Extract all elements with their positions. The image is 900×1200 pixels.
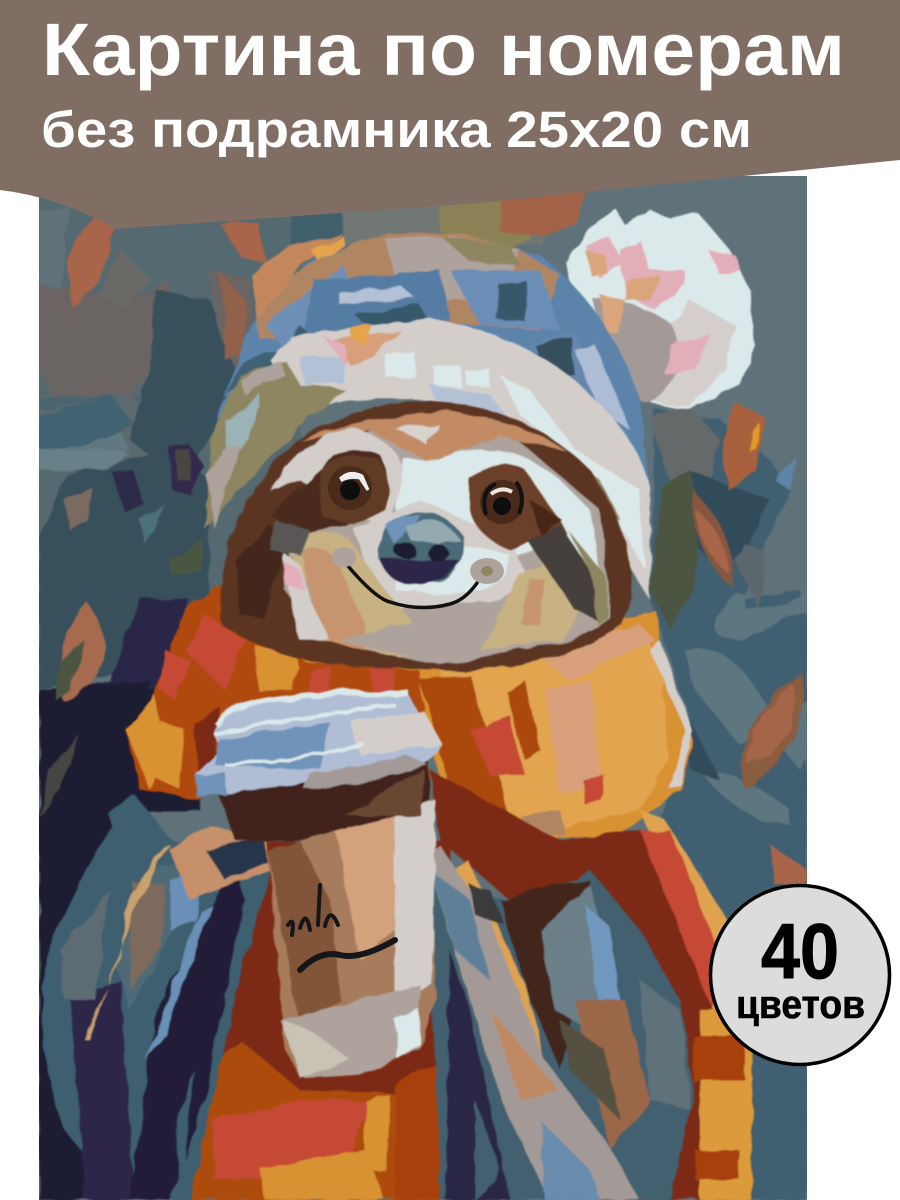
title: Картина по номерам (42, 8, 845, 91)
face fur (285, 418, 612, 665)
badge number: 40 (761, 907, 839, 995)
cup lid (195, 693, 443, 796)
right eye (480, 480, 524, 524)
hat pompom (566, 208, 755, 409)
autumn leaves (39, 208, 807, 885)
subtitle: без подрамника 25х20 см (41, 101, 752, 158)
cup scribble lettering (288, 885, 395, 970)
eye patches (270, 450, 610, 625)
scarf lower body (180, 840, 470, 1200)
navy lower left (92, 596, 188, 690)
cup body (268, 800, 436, 1078)
painting background (39, 176, 807, 1200)
sloth face (221, 402, 631, 670)
cheek spots (332, 547, 504, 584)
nose (378, 512, 462, 586)
hat white brim (205, 318, 650, 600)
header banner (0, 0, 900, 229)
coffee cup (195, 693, 443, 1078)
knitted hat (218, 232, 650, 500)
cup sleeve (219, 755, 430, 840)
right sleeve (420, 845, 693, 1200)
scarf (126, 585, 752, 1200)
badge label: цветов (736, 983, 865, 1027)
left blotches (39, 198, 300, 590)
left eye (328, 466, 372, 510)
left sleeve (42, 795, 270, 1200)
badge: 40 colours (710, 886, 890, 1064)
painting: sloth with coffee (39, 176, 807, 1200)
right background (650, 410, 807, 900)
top centre blotches (342, 206, 546, 246)
smile (348, 566, 477, 608)
